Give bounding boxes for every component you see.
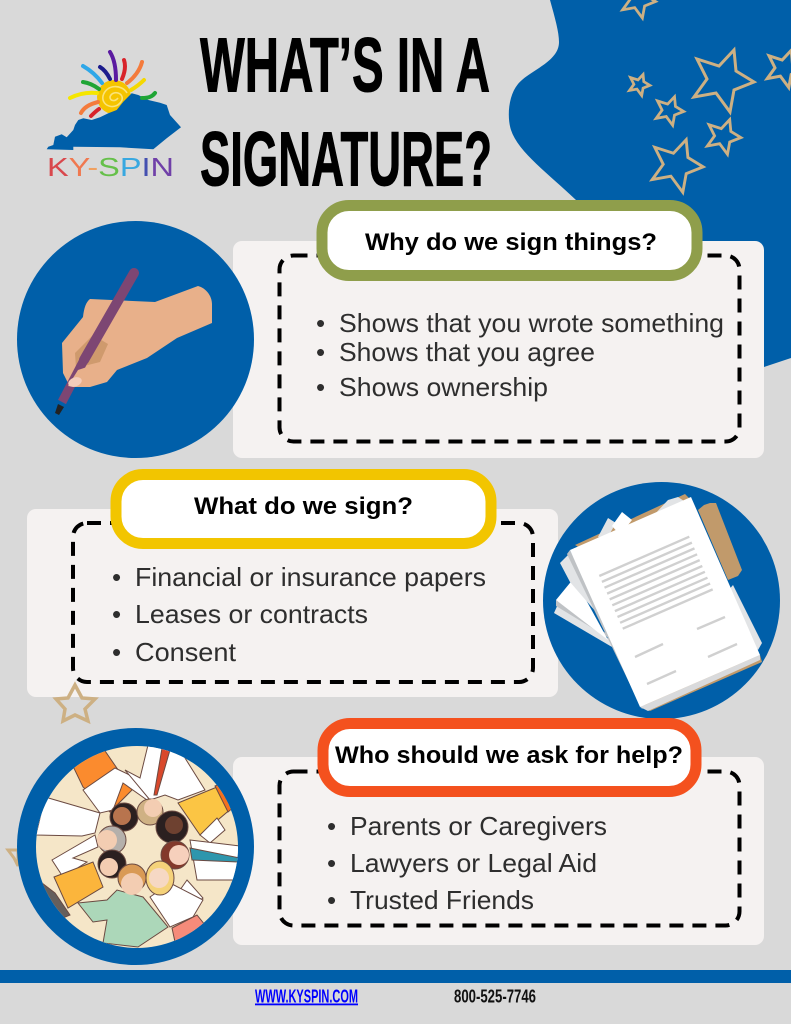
panel: who should we ask: Trusted Friends [350, 885, 534, 915]
panel: what do we sign [27, 474, 558, 697]
logo: KY-SPIN [47, 52, 181, 182]
decorative star left [56, 685, 95, 721]
panel: who should we ask: Lawyers or Legal Aid [350, 848, 597, 878]
footer phone: 800-525-7746 [454, 986, 536, 1006]
panel: why do we sign: • [316, 308, 325, 338]
panel: why do we sign: • [316, 337, 325, 367]
title: SIGNATURE? [200, 116, 492, 202]
blue corner blob [509, 0, 791, 367]
panel: who should we ask [233, 724, 764, 945]
panel: what do we sign: • [112, 562, 121, 592]
icon: papers on clipboard [543, 482, 780, 719]
panel: who should we ask: Parents or Caregivers [350, 811, 607, 841]
logo: KY-SPIN: KY-SPIN [47, 152, 174, 182]
panel: why do we sign: Why do we sign things? [365, 229, 657, 256]
icon: hand writing with pen [17, 221, 254, 458]
panel: who should we ask: • [327, 885, 336, 915]
panel: what do we sign: Leases or contracts [135, 599, 368, 629]
panel: who should we ask: Who should we ask for help? [335, 742, 683, 769]
panel: who should we ask: • [327, 848, 336, 878]
panel: what do we sign: • [112, 599, 121, 629]
decorative stars cluster [623, 0, 791, 192]
title: WHAT’S IN A [200, 22, 490, 108]
icon: circle of people [17, 728, 254, 965]
panel: why do we sign: Shows that you wrote something [339, 308, 724, 338]
panel: why do we sign [233, 206, 764, 458]
panel: why do we sign: • [316, 372, 325, 402]
panel: what do we sign: Consent [135, 637, 237, 667]
panel: what do we sign: What do we sign? [194, 493, 413, 520]
panel: who should we ask: • [327, 811, 336, 841]
title [200, 22, 492, 202]
decorative star behind group [8, 850, 18, 866]
panel: why do we sign: Shows ownership [339, 372, 548, 402]
panel: what do we sign: • [112, 637, 121, 667]
panel: what do we sign: Financial or insurance papers [135, 562, 486, 592]
panel: why do we sign: Shows that you agree [339, 337, 595, 367]
footer bar [0, 970, 791, 983]
footer website: WWW.KYSPIN.COM [255, 986, 358, 1006]
